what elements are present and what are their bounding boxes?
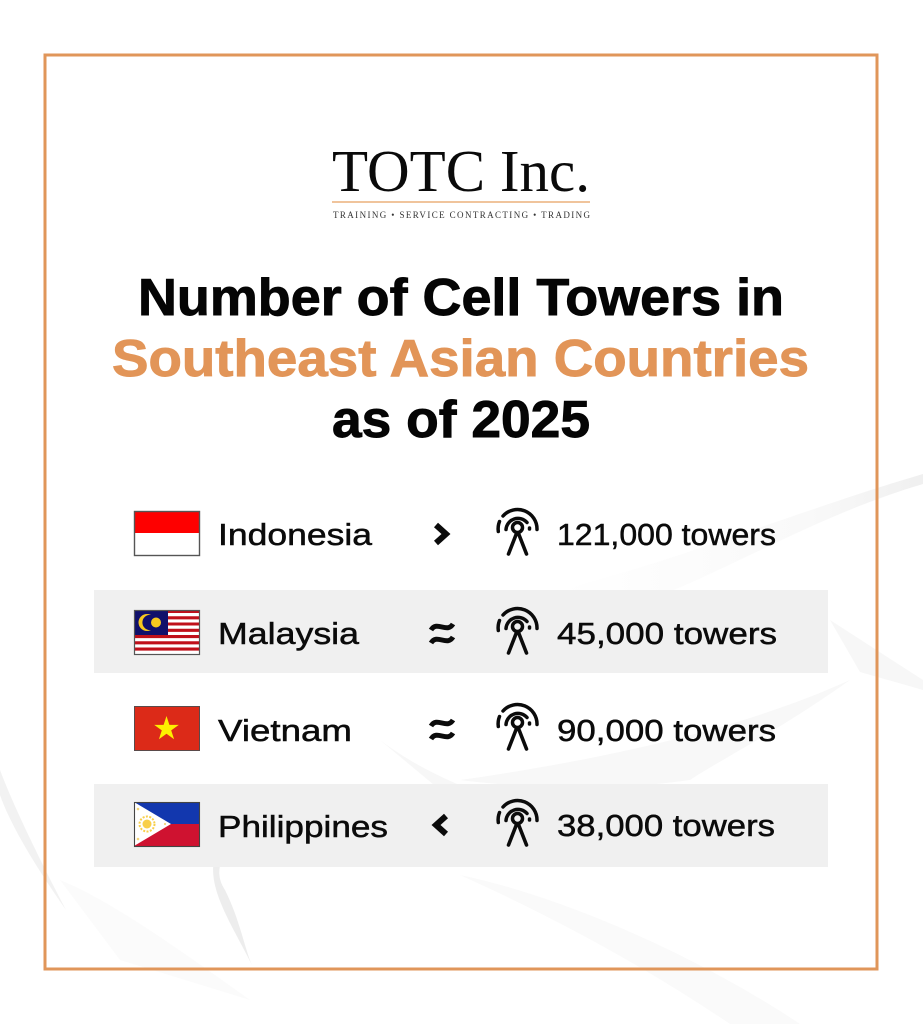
row band [94, 784, 828, 867]
comparison: less than [436, 816, 446, 834]
title line 2 (highlight): Southeast Asian Countries [112, 330, 809, 388]
icon: cell tower [498, 609, 537, 653]
comparison: approximately [431, 720, 453, 739]
flag: Indonesia [134, 511, 200, 556]
flag: Malaysia [134, 610, 200, 654]
comparison: approximately [431, 624, 453, 643]
row: Philippines [94, 784, 828, 867]
logo wordmark: TOTC Inc. [332, 138, 590, 204]
tower count: 38,000 towers [557, 808, 775, 843]
tower count: 121,000 towers [557, 517, 776, 552]
icon: cell tower [498, 801, 537, 845]
country name: Vietnam [218, 713, 352, 748]
country name: Malaysia [218, 616, 360, 651]
row: Indonesia [134, 510, 776, 556]
title line 1: Number of Cell Towers in [138, 269, 784, 327]
comparison: greater than [436, 525, 446, 543]
flag: Philippines [134, 802, 200, 846]
country name: Indonesia [218, 517, 373, 552]
logo tagline: TRAINING • SERVICE CONTRACTING • TRADING [333, 210, 590, 220]
row: Malaysia [94, 590, 828, 673]
icon: cell tower [498, 705, 537, 749]
background: wispy texture [0, 474, 923, 1024]
flag: Vietnam [134, 706, 200, 750]
country name: Philippines [218, 809, 388, 844]
tower count: 45,000 towers [557, 616, 777, 651]
title [112, 269, 809, 449]
row band [94, 590, 828, 673]
icon: cell tower [498, 510, 537, 554]
tower count: 90,000 towers [557, 713, 776, 748]
row: Vietnam [134, 705, 776, 750]
logo: TOTC Inc. [332, 138, 590, 220]
logo rule [332, 201, 590, 203]
title line 3: as of 2025 [332, 391, 590, 449]
